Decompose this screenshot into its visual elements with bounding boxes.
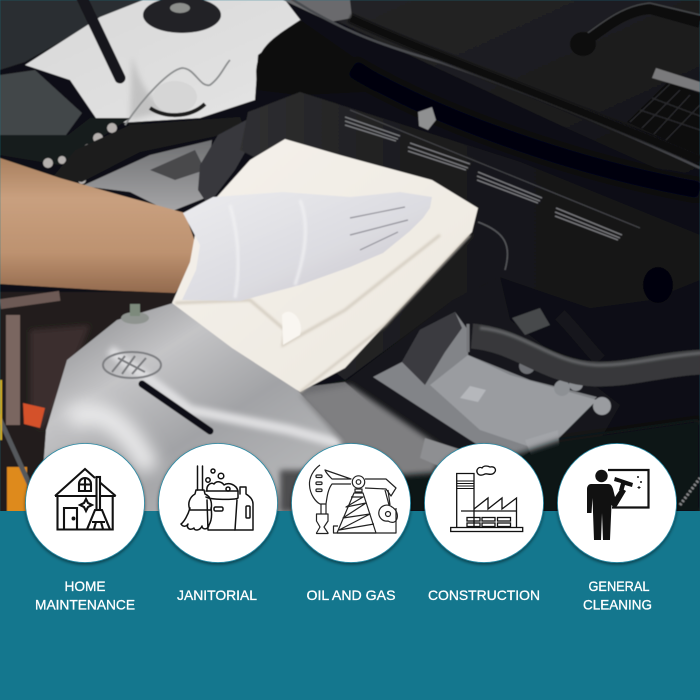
bolts: [43, 123, 117, 184]
label: HOME: [64, 578, 106, 594]
rubber hose: [468, 324, 700, 374]
photo: gloved hand wiping engine bay with towel: [0, 0, 700, 512]
item: home maintenance: [26, 444, 144, 612]
label: [583, 578, 652, 612]
silver panel: [82, 140, 212, 212]
circle badge: [424, 444, 544, 562]
embossed emblem: [103, 352, 161, 378]
black connector: [512, 308, 550, 335]
dark bracket: [198, 118, 255, 205]
dark lower photo edge: [330, 420, 700, 512]
round bolt seat: [153, 81, 197, 113]
vent grille: [627, 68, 700, 155]
dark engine edge: [0, 118, 130, 165]
slot: [142, 384, 210, 431]
label: JANITORIAL: [177, 587, 257, 603]
dark hose ring: [256, 20, 400, 95]
stud bolt: [121, 304, 149, 324]
icon: house with broom: [55, 469, 116, 530]
black rod: [82, 0, 120, 78]
circle badge: [26, 444, 144, 562]
item: oil and gas: [292, 444, 410, 603]
label: CLEANING: [583, 596, 652, 612]
engine metal block: [295, 277, 620, 480]
plastic clip: [418, 107, 436, 130]
white strut tower panel: [25, 0, 302, 124]
hollow intake: [643, 267, 673, 303]
ridged vents: [345, 117, 622, 240]
heat shield: [43, 303, 368, 512]
upper right cover: [283, 0, 700, 190]
top-left dark hood area: [0, 0, 145, 70]
arm: [0, 158, 202, 293]
left grey box: [0, 70, 82, 135]
engine cover: [240, 92, 700, 380]
label: CONSTRUCTION: [428, 587, 540, 603]
handle on cover: [570, 3, 700, 56]
icon: factory: [451, 466, 523, 532]
strut mount cap: [143, 0, 221, 33]
strut shadow: [130, 55, 170, 120]
circle badge: [558, 444, 676, 562]
circle badge: [158, 444, 278, 562]
icon: oil pumpjack: [309, 465, 397, 534]
icon: person cleaning window: [587, 470, 648, 540]
item: construction: [424, 444, 544, 603]
icon: mop, bucket and bottle: [181, 466, 253, 530]
label: [35, 578, 135, 612]
item: general cleaning: [558, 444, 676, 612]
item: janitorial: [158, 444, 278, 603]
teal band: [0, 511, 700, 700]
glove: [182, 192, 432, 301]
circle badge: [292, 444, 410, 562]
towel: [172, 139, 478, 392]
label: GENERAL: [588, 578, 650, 594]
label: MAINTENANCE: [35, 596, 135, 612]
label: OIL AND GAS: [306, 587, 396, 603]
metal brake line: [125, 60, 230, 125]
lower-left wiring area: [0, 291, 175, 512]
black rail: [52, 117, 245, 182]
